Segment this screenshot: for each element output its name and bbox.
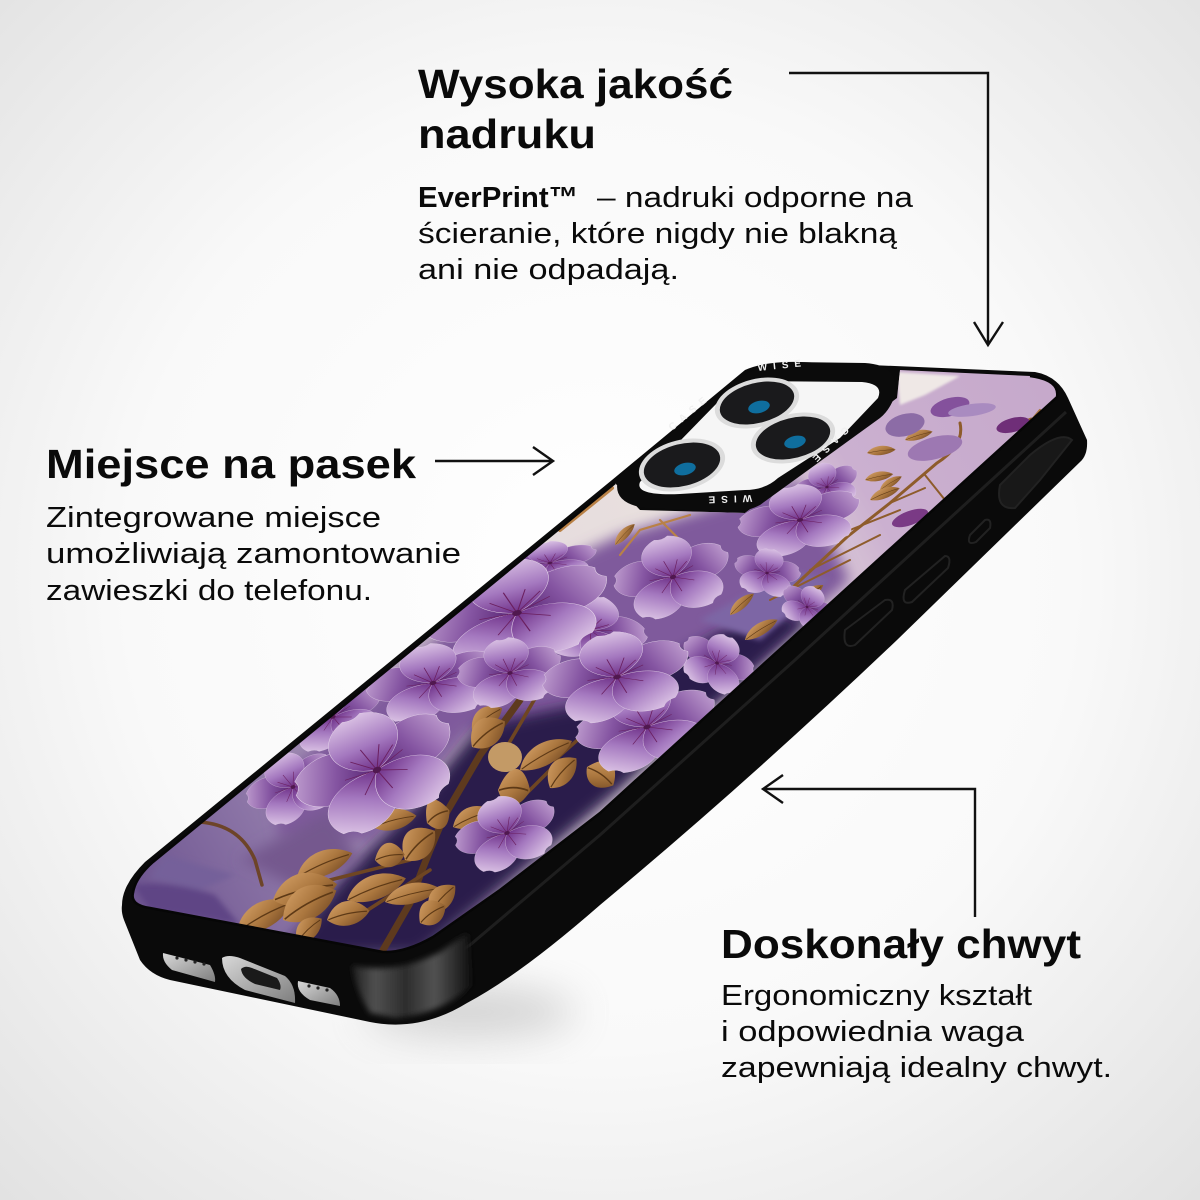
gold bud xyxy=(488,742,522,772)
lilac paint bottom-left xyxy=(136,870,239,923)
camera plate xyxy=(639,381,879,494)
case highlight edge xyxy=(405,412,1066,972)
body text: ścieranie, które nigdy nie blakną xyxy=(418,218,898,250)
body text: Zintegrowane miejsce xyxy=(46,502,381,534)
callout: strap slot xyxy=(46,441,461,607)
body text: zapewniają idealny chwyt. xyxy=(721,1052,1112,1084)
flowers xyxy=(230,451,875,890)
arrow: print quality xyxy=(789,73,1003,345)
heading: Miejsce na pasek xyxy=(46,441,416,487)
camera island: WISE xyxy=(702,492,752,505)
arrow: strap slot xyxy=(435,447,553,475)
body text xyxy=(721,980,1112,1084)
body text: Ergonomiczny kształt xyxy=(721,980,1032,1012)
corner sheen xyxy=(352,932,472,1018)
purple paint mid xyxy=(706,574,823,642)
camera island xyxy=(617,358,896,512)
gold leaves xyxy=(230,415,1034,948)
heading: Doskonały chwyt xyxy=(721,921,1081,967)
phone shadow xyxy=(365,986,575,1038)
usb port xyxy=(222,956,295,1003)
artwork base xyxy=(134,370,1056,951)
callout: print quality xyxy=(418,61,914,286)
body text xyxy=(46,502,461,607)
speaker left xyxy=(163,953,215,982)
arrow: grip xyxy=(763,775,975,917)
lens left xyxy=(633,430,731,500)
heading: nadruku xyxy=(418,111,596,157)
speaker holes xyxy=(175,956,329,992)
printed artwork xyxy=(134,370,1056,951)
body text: umożliwiają zamontowanie xyxy=(46,538,461,570)
dark lower region xyxy=(280,610,810,955)
gold branches xyxy=(200,410,1040,950)
heading: Wysoka jakość xyxy=(418,61,733,107)
phone case with printed back xyxy=(100,350,1100,1025)
top right buds xyxy=(883,393,1031,531)
lens right xyxy=(745,404,841,472)
speaker right xyxy=(298,981,340,1006)
mauve lower left xyxy=(246,816,359,884)
brand ring text top: CASE xyxy=(667,392,714,433)
camera island: WISE xyxy=(757,358,808,374)
purple under flowers xyxy=(270,480,850,840)
brand ring text bottom: CASE xyxy=(806,424,851,468)
body text: – nadruki odporne na xyxy=(597,182,914,214)
body text: EverPrint™ xyxy=(418,182,578,214)
body text: ani nie odpadają. xyxy=(418,254,679,286)
body text xyxy=(418,182,914,286)
body text: i odpowiednia waga xyxy=(721,1016,1025,1048)
heading xyxy=(418,61,733,157)
screen rim xyxy=(133,376,1057,952)
body text: zawieszki do telefonu. xyxy=(46,575,372,607)
callout: grip xyxy=(721,921,1112,1084)
white paint top xyxy=(897,372,960,405)
side buttons xyxy=(844,437,1072,646)
lens top xyxy=(709,369,805,437)
case body xyxy=(122,362,1087,1025)
